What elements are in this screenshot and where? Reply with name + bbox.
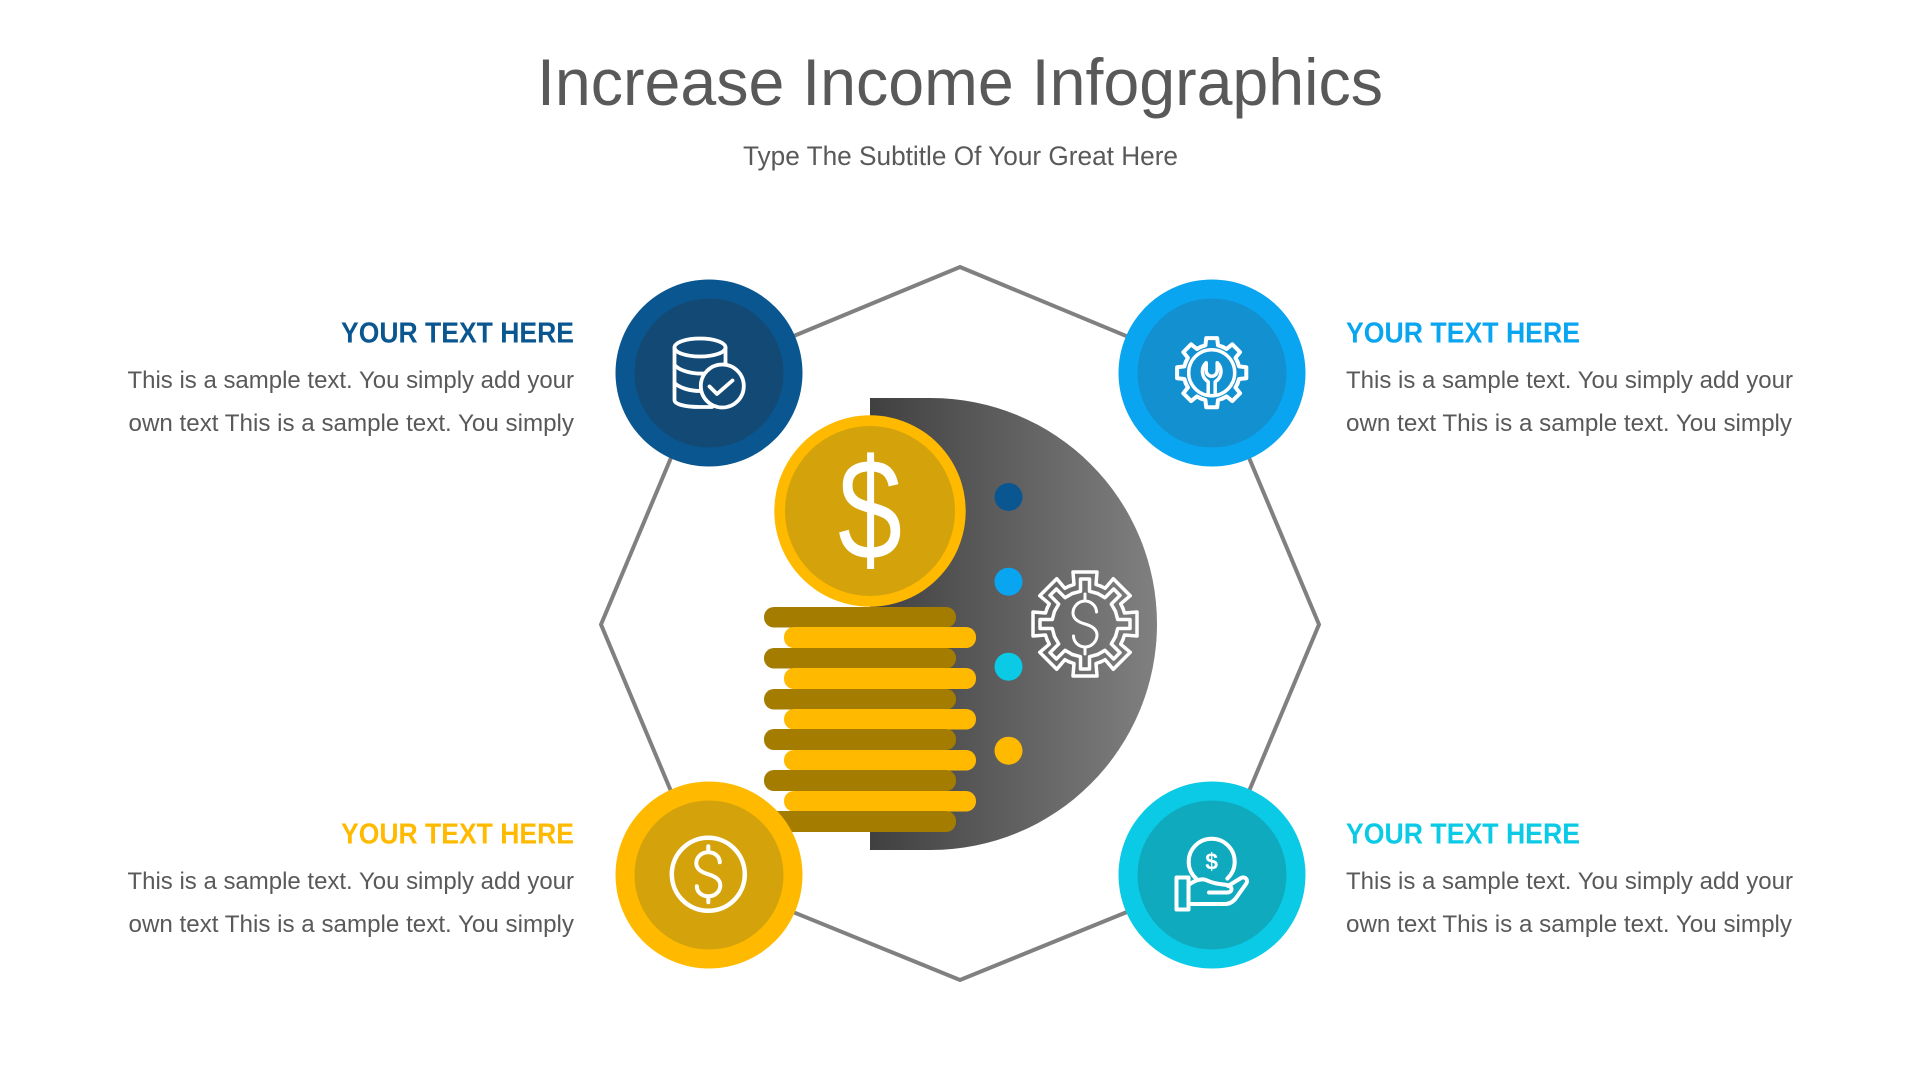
text block: top right: This is a sample text. You simply add your bbox=[1346, 367, 1793, 394]
node: top left database bbox=[616, 280, 802, 466]
coin stack bbox=[764, 607, 976, 832]
text block: bottom right: YOUR TEXT HERE bbox=[1346, 818, 1580, 850]
text block: top left: This is a sample text. You simply add your bbox=[128, 367, 574, 394]
text block: bottom right: own text This is a sample text. You simply bbox=[1346, 911, 1792, 938]
icon: hand holding coin bbox=[1176, 839, 1247, 910]
icon: hand holding coin: $ bbox=[1205, 848, 1218, 874]
text block: top left: own text This is a sample text. You simply bbox=[128, 410, 574, 437]
text block: top left bbox=[128, 318, 574, 437]
text block: bottom left: own text This is a sample text. You simply bbox=[128, 911, 574, 938]
text block: top right: YOUR TEXT HERE bbox=[1346, 318, 1580, 350]
text block: bottom left bbox=[128, 818, 574, 938]
octagon outline bbox=[601, 267, 1319, 980]
icon: database check bbox=[674, 338, 744, 408]
text block: top left: YOUR TEXT HERE bbox=[341, 318, 574, 350]
node: bottom left dollar bbox=[616, 782, 802, 968]
half-round grey backdrop bbox=[870, 398, 1157, 850]
top coin with dollar sign: $ bbox=[838, 429, 902, 590]
icon: gear with wrench bbox=[1177, 338, 1246, 407]
title: Increase Income Infographics bbox=[537, 45, 1383, 119]
subtitle: Type The Subtitle Of Your Great Here bbox=[743, 141, 1178, 171]
node: top right gear wrench bbox=[1118, 280, 1306, 466]
text block: top right bbox=[1346, 318, 1793, 437]
text block: bottom right: This is a sample text. You simply add your bbox=[1346, 868, 1793, 895]
colour dots bbox=[994, 483, 1022, 765]
text block: bottom left: YOUR TEXT HERE bbox=[341, 818, 574, 850]
text block: top right: own text This is a sample text. You simply bbox=[1346, 410, 1792, 437]
node: bottom right hand coin bbox=[1118, 782, 1306, 968]
icon: dollar gear bbox=[1033, 572, 1137, 676]
text block: bottom right bbox=[1346, 818, 1793, 938]
text block: bottom left: This is a sample text. You simply add your bbox=[128, 868, 574, 895]
top coin with dollar sign bbox=[774, 415, 966, 607]
icon: dollar ring bbox=[672, 838, 745, 911]
